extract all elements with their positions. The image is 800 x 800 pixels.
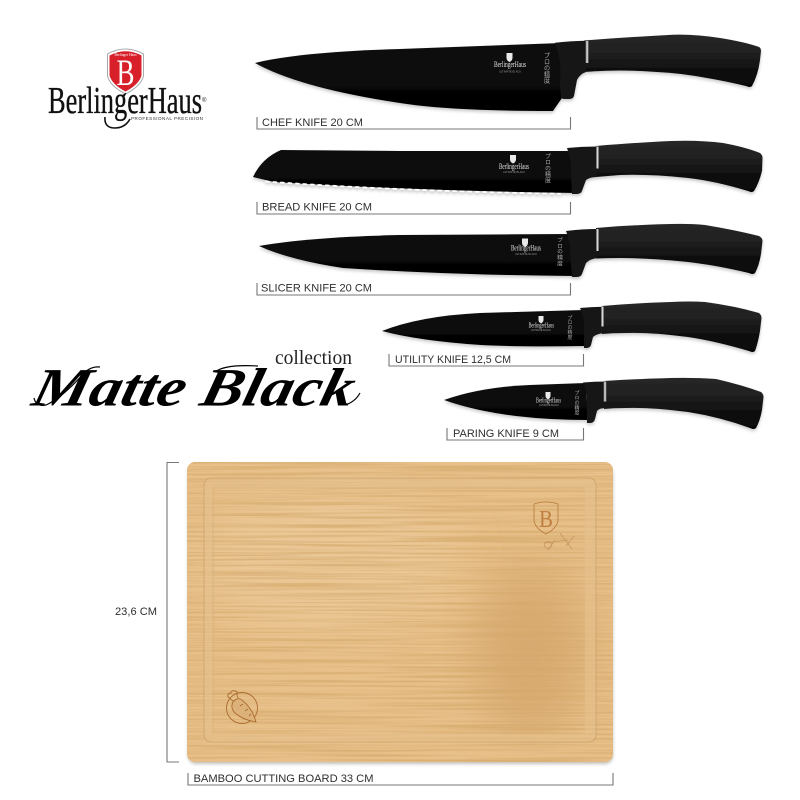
blade logo: BerlingerHaus [494, 60, 526, 69]
engraving: shield logo: B [539, 507, 553, 533]
juice groove [204, 478, 596, 742]
ring [596, 146, 599, 168]
blade logo: BerlingerHaus [499, 162, 529, 171]
knife: slicer [259, 224, 762, 277]
script title: Matte Black [26, 357, 362, 417]
blade logo: ULTIMATE BLACK [531, 329, 551, 332]
japanese text: プロの精度 [544, 153, 552, 184]
engraving: utensils [544, 533, 574, 550]
blade [444, 383, 588, 420]
blade logo: ULTIMATE BLACK [539, 404, 559, 407]
blade logo [511, 238, 541, 256]
label: bread knife [257, 202, 570, 214]
handle [604, 378, 764, 429]
blade logo [494, 53, 526, 74]
icon: red shield [108, 49, 144, 94]
blade [255, 43, 562, 111]
blade logo: ULTIMATE BLACK [515, 253, 537, 256]
blade logo: BerlingerHaus [528, 322, 554, 330]
label: bread knife: BREAD KNIFE 20 CM [262, 202, 372, 214]
serrated edge [266, 182, 560, 194]
board shadow [188, 466, 613, 764]
ring [604, 382, 606, 402]
bolster and finger guard [566, 229, 597, 277]
label: slicer knife: SLICER KNIFE 20 CM [261, 282, 372, 294]
ring [596, 229, 599, 251]
ring [586, 41, 589, 63]
light central area [218, 506, 442, 618]
blade logo: ULTIMATE BLACK [503, 171, 525, 174]
icon: red shield: Berlinger Haus [114, 52, 137, 57]
blade logo [536, 392, 561, 407]
blade logo [528, 316, 554, 332]
bolster and finger guard [583, 382, 606, 423]
knife: chef [255, 35, 761, 111]
label: utility knife: UTILITY KNIFE 12,5 CM [395, 354, 511, 366]
handle [584, 35, 761, 87]
bolster and finger guard [567, 146, 597, 194]
handle [602, 302, 762, 352]
label: bamboo cutting board: BAMBOO CUTTING BOARD 33 CM [194, 773, 374, 785]
bolster and finger guard [555, 41, 586, 99]
knife: bread [253, 141, 762, 194]
label: bamboo cutting board [188, 773, 613, 785]
engraving: shield logo [534, 502, 558, 534]
tagline: PROFESSIONAL PRECISION [131, 116, 203, 121]
blade logo [499, 155, 529, 174]
label: utility knife [389, 354, 584, 366]
icon: red shield: B [116, 53, 134, 94]
g swash [105, 117, 130, 128]
label: slicer knife [257, 282, 570, 295]
handle [596, 141, 762, 192]
knife: paring [444, 378, 764, 429]
japanese text: プロの精度 [542, 52, 552, 85]
japanese text: プロの精度 [566, 315, 574, 341]
label: paring knife: PARING KNIFE 9 CM [453, 428, 559, 440]
collection word: collection [275, 347, 352, 369]
blade [253, 150, 575, 193]
ring [601, 306, 604, 326]
blade [259, 234, 574, 276]
japanese text: プロの精度 [556, 237, 564, 267]
blade logo: BerlingerHaus [511, 244, 541, 252]
knife: utility [382, 302, 762, 352]
bolster and finger guard [580, 307, 604, 348]
blade [382, 310, 586, 346]
logo: BerlingerHaus [48, 49, 207, 128]
board body [187, 462, 613, 762]
registered mark: ® [202, 97, 207, 104]
cutting board [187, 462, 613, 764]
blade logo: ULTIMATE BLACK [499, 70, 521, 74]
title: Matte Black collection [26, 347, 362, 417]
dimension: board height [115, 462, 179, 762]
handle [596, 224, 762, 274]
title flourishes [34, 366, 360, 405]
japanese text: プロの精度 [574, 390, 580, 416]
dimension: board height: 23,6 CM [115, 606, 157, 618]
engraving: carrot in circle [226, 691, 258, 724]
blade logo: BerlingerHaus [536, 396, 561, 404]
label: chef knife [257, 117, 570, 129]
wood grain [187, 462, 613, 762]
label: chef knife: CHEF KNIFE 20 CM [262, 117, 363, 129]
wordmark: BerlingerHaus [48, 80, 202, 122]
darker wood patch [475, 565, 585, 735]
